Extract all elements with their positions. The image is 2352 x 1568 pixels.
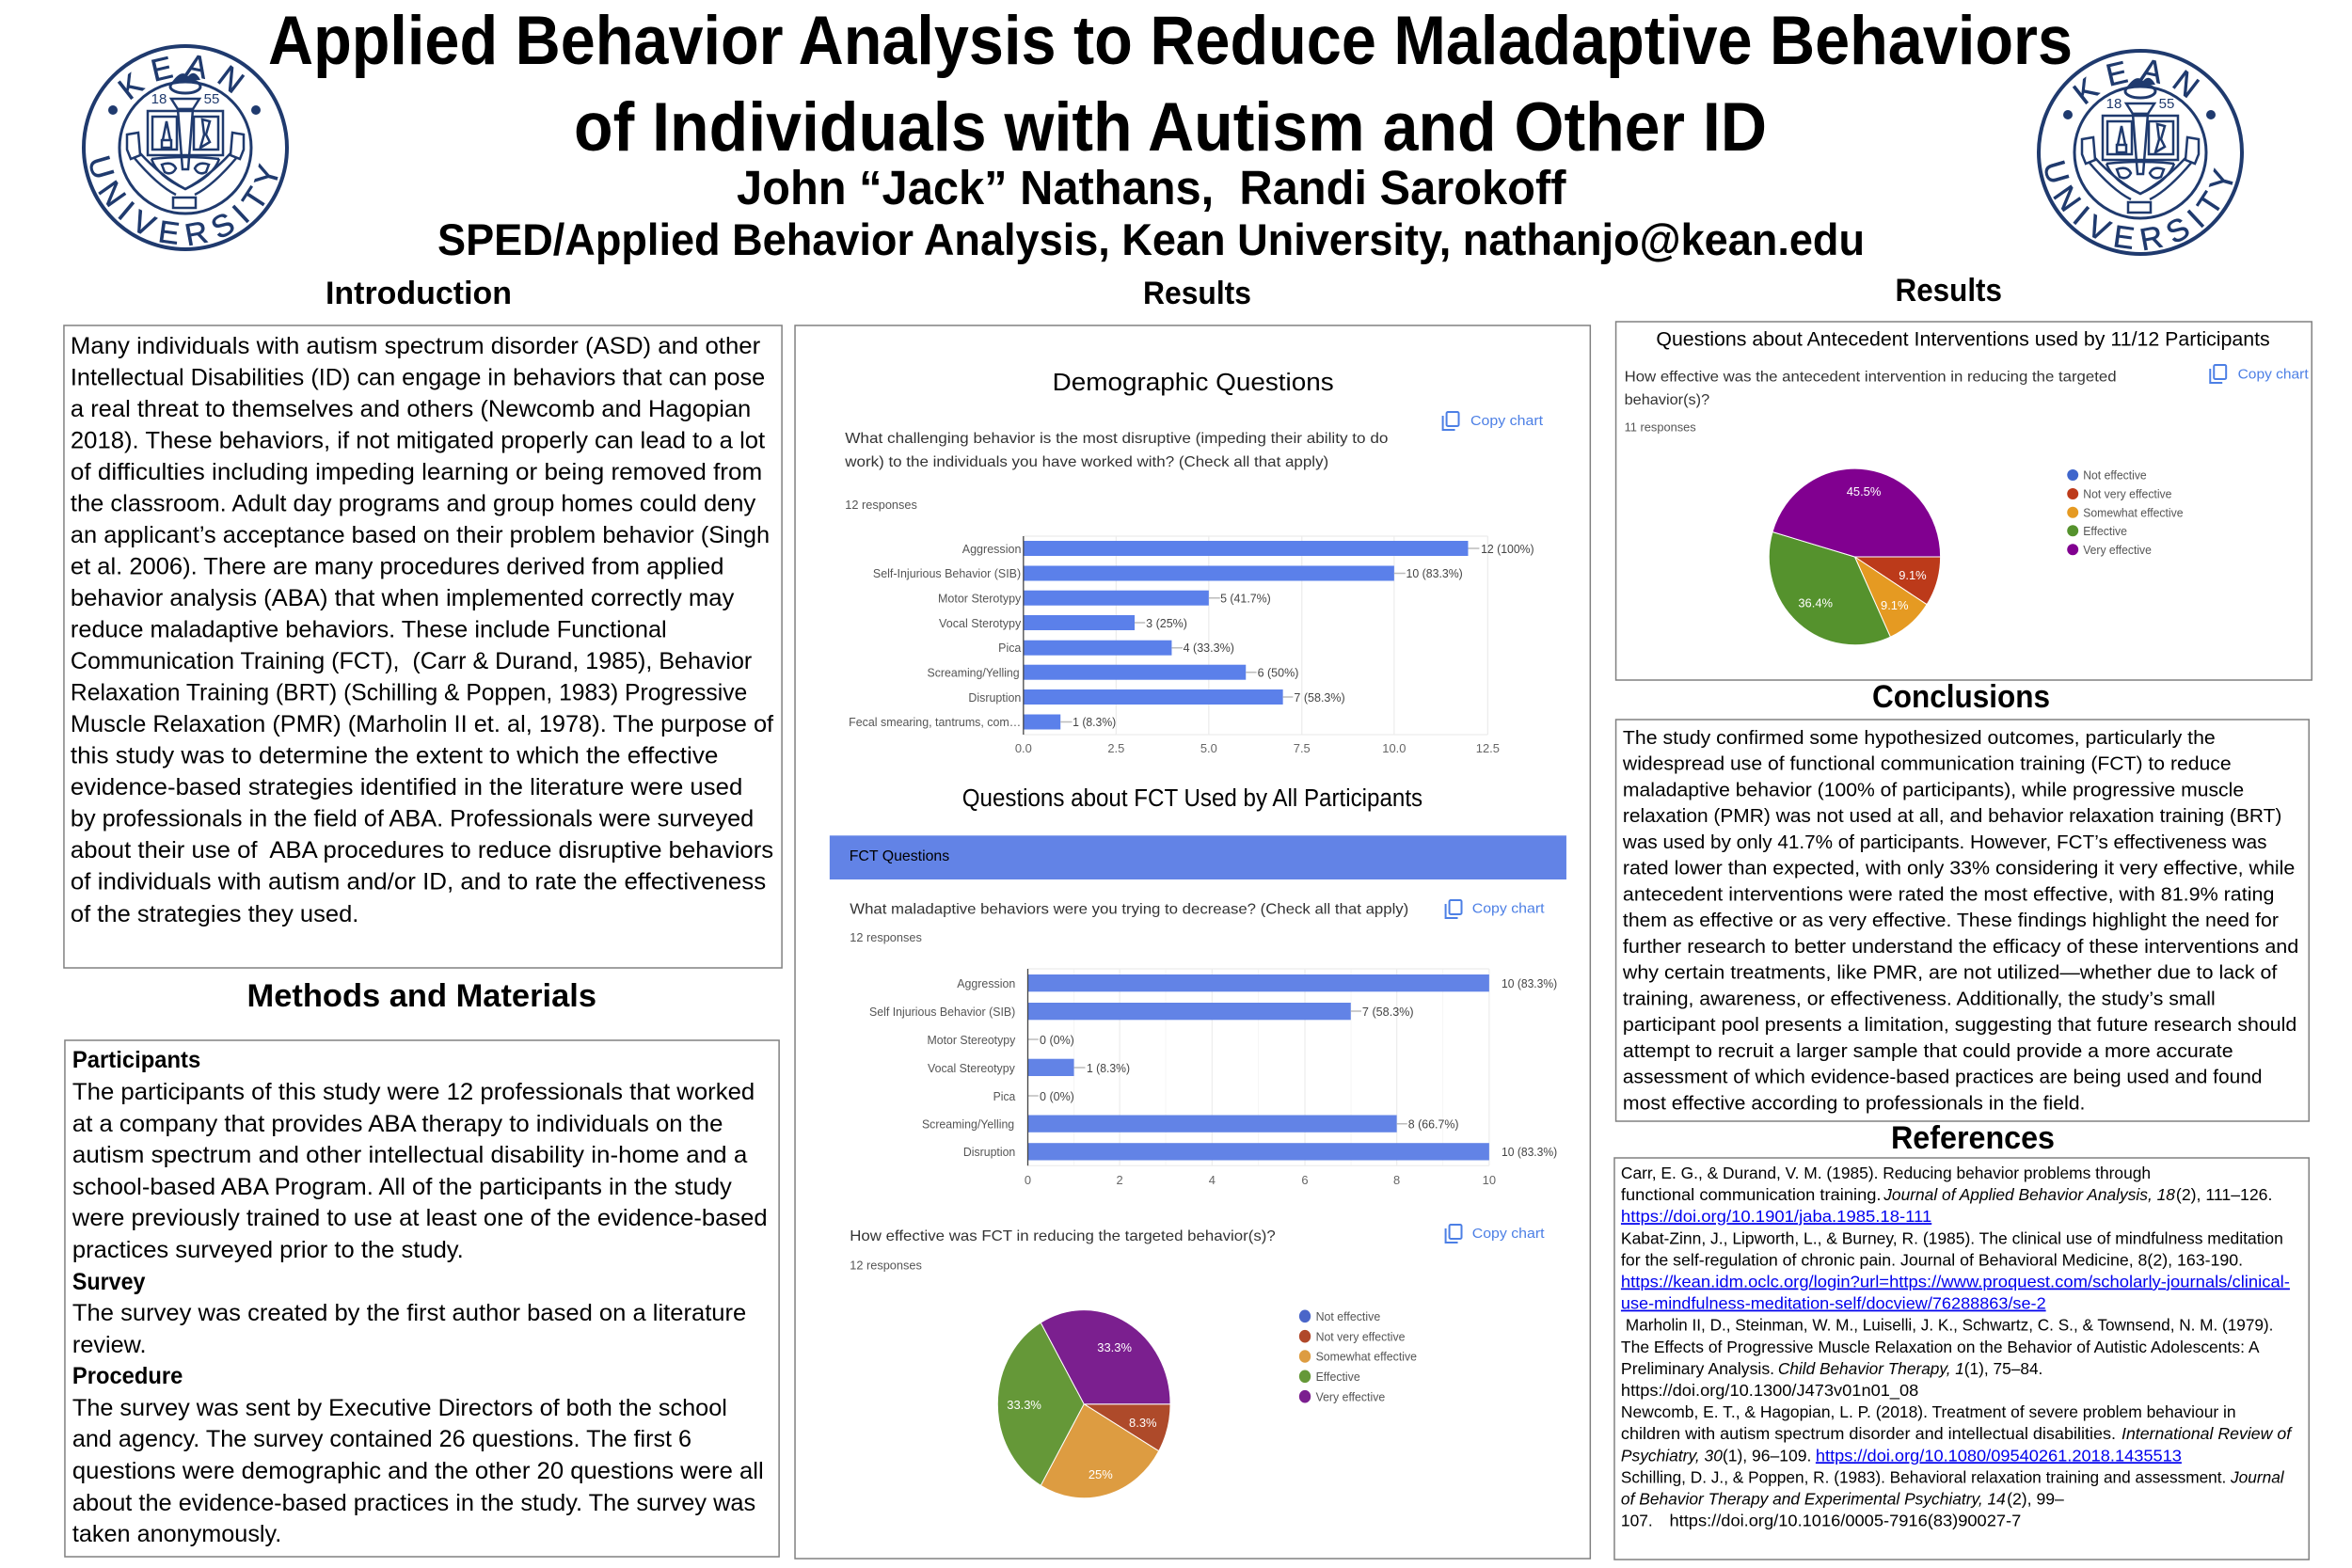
bar chart: challenging behaviors: Vocal Sterotypy: [939, 616, 1022, 630]
bar chart: challenging behaviors: 7 (58.3%): [1294, 690, 1345, 705]
text block: reference list: Preliminary Analysis.: [1621, 1359, 1774, 1378]
icon: Kean University seal, left: 18: [151, 91, 167, 107]
text block: survey: The survey was created by the first author based on a literature: [72, 1300, 746, 1326]
panel: conclusions: [1616, 720, 2309, 1121]
text block: reference list: Psychiatry, 30: [1621, 1446, 1723, 1465]
icon: Kean University seal, right: KEAN: [2072, 60, 2200, 105]
legend: FCT effectiveness: [1299, 1309, 1417, 1403]
text block: conclusions body: widespread use of functional communication training (FCT) to reduce: [1622, 753, 2232, 775]
bar chart: challenging behaviors: Self-Injurious Behavior (SIB): [873, 566, 1021, 580]
bar chart: maladaptive behaviors: Disruption: [963, 1145, 1015, 1159]
bar chart: maladaptive behaviors: 4: [1209, 1173, 1216, 1187]
text block: participants: at a company that provides ABA therapy to individuals on the: [72, 1111, 723, 1137]
text block: conclusions body: rated lower than expected, with only 33% considering it very effective, while: [1623, 858, 2295, 879]
icon: Kean University seal, right: UNIVERSITY: [2045, 160, 2233, 250]
pie chart: FCT effectiveness: 25%: [1089, 1467, 1113, 1481]
icon: copy chart: [1443, 412, 1543, 430]
text block: introduction body: Muscle Relaxation (PMR) (Marholin II et. al, 1978). The purpose of: [71, 711, 773, 737]
text block: reference list: children with autism spectrum disorder and intellectual disabilities.: [1621, 1424, 2116, 1443]
text block: introduction body: the classroom. Adult day programs and group homes could deny: [71, 490, 756, 517]
panel: results centre: [795, 325, 1590, 1559]
text block: reference list: Schilling, D. J., & Poppen, R. (1983). Behavioral relaxation training and assessment.: [1621, 1467, 2226, 1486]
text block: reference list: https://doi.org/10.1080/09540261.2018.1435513: [1816, 1446, 2182, 1465]
banner: FCT Questions: FCT Questions: [850, 848, 949, 864]
text block: reference list: Journal of Applied Behavior Analysis, 18: [1883, 1185, 2175, 1204]
icon: Kean University seal, right: 18: [2106, 96, 2122, 112]
text block: conclusions body: antecedent interventions were rated the most effective, with 81.9% rating: [1623, 883, 2274, 905]
text block: participants: autism spectrum and other intellectual disability in-home and a: [72, 1142, 747, 1168]
text: demographic question: work) to the individuals you have worked with? (Check all that apply): [844, 454, 1328, 470]
text block: introduction body: Communication Training (FCT), (Carr & Durand, 1985), Behavior: [71, 648, 752, 674]
text block: introduction body: this study was to determine the extent to which the effective: [71, 742, 718, 769]
panel: references: [1614, 1158, 2309, 1560]
bar chart: maladaptive behaviors: Vocal Stereotypy: [928, 1061, 1015, 1075]
pie chart: antecedent effectiveness: 36.4%: [1798, 595, 1833, 610]
panel: introduction: [64, 325, 782, 968]
text block: reference list: International Review of: [2122, 1424, 2293, 1443]
legend: antecedent effectiveness: Not very effective: [2083, 487, 2171, 501]
text block: conclusions body: why certain treatments, like PMR, are not utilized—whether due to lack of: [1622, 962, 2278, 984]
bar chart: maladaptive behaviors: 2: [1117, 1173, 1123, 1187]
bar chart: challenging behaviors: Aggression: [962, 542, 1021, 556]
text block: participants: practices surveyed prior to the study.: [72, 1237, 464, 1263]
text: antecedent question: [1625, 370, 2117, 408]
icon: copy chart: Copy chart: [1472, 902, 1545, 917]
text block: procedure: questions were demographic and the other 20 questions were all: [72, 1458, 764, 1484]
bar chart: maladaptive behaviors: 10 (83.3%): [1502, 976, 1557, 990]
text block: reference list: [1621, 1164, 2293, 1530]
text block: conclusions body: further research to better understand the efficacy of these interventions and: [1623, 936, 2298, 958]
text block: reference list: (2), 111–126.: [2176, 1185, 2272, 1204]
bar chart: maladaptive behaviors: Motor Stereotypy: [928, 1033, 1016, 1047]
text: demographic question: What challenging behavior is the most disruptive (impeding their ability to do: [845, 431, 1389, 447]
legend: antecedent effectiveness: Effective: [2083, 524, 2127, 538]
legend: FCT effectiveness: Not effective: [1316, 1309, 1380, 1323]
text block: introduction body: et al. 2006). There are many procedures derived from applied: [71, 553, 723, 580]
icon: copy chart: Copy chart: [1472, 1227, 1545, 1242]
text block: conclusions body: [1622, 727, 2298, 1114]
bar chart: maladaptive behaviors: 0 (0%): [1040, 1089, 1074, 1103]
text: responses count: 12 responses: [850, 930, 922, 944]
icon: copy chart: [1446, 900, 1545, 918]
text block: conclusions body: participant pool presents a limitation, suggesting that future research should: [1623, 1014, 2296, 1036]
bar chart: challenging behaviors: Disruption: [968, 690, 1021, 705]
text block: conclusions body: maladaptive behavior (100% of participants), while progressive muscle: [1623, 779, 2244, 801]
legend: antecedent effectiveness: Very effective: [2083, 543, 2152, 557]
icon: Kean University seal, left: UNIVERSITY: [90, 156, 278, 246]
text block: conclusions body: assessment of which evidence-based practices are being used and found: [1623, 1067, 2262, 1088]
text block: reference list: Child Behavior Therapy, 1: [1778, 1359, 1964, 1378]
text: responses count: 12 responses: [845, 498, 917, 512]
pie chart: FCT effectiveness: [997, 1310, 1170, 1498]
bar chart: challenging behaviors: Screaming/Yelling: [928, 665, 1020, 680]
text block: conclusions body: attempt to recruit a larger sample that could provide a more accurate: [1623, 1040, 2233, 1062]
text block: introduction body: reduce maladaptive behaviors. These include Functional: [71, 616, 667, 643]
legend: FCT effectiveness: Very effective: [1316, 1389, 1385, 1403]
banner: FCT Questions: [830, 835, 1566, 879]
icon: copy chart: [1446, 1225, 1545, 1243]
icon: Kean University seal, right: 55: [2159, 96, 2174, 112]
panel: methods and materials: [65, 1040, 779, 1557]
legend: antecedent effectiveness: Somewhat effective: [2083, 505, 2184, 519]
bar chart: maladaptive behaviors: 1 (8.3%): [1087, 1061, 1130, 1075]
text block: survey: review.: [72, 1332, 147, 1358]
text block: conclusions body: relaxation (PMR) was not used at all, and behavior relaxation training (BRT): [1623, 805, 2281, 827]
bar chart: maladaptive behaviors: Screaming/Yelling: [922, 1117, 1014, 1132]
bar chart: challenging behaviors: 2.5: [1107, 741, 1124, 755]
bar chart: challenging behaviors: 5.0: [1200, 741, 1217, 755]
title: of Individuals with Autism and Other ID: [574, 89, 1767, 166]
text block: survey: Survey: [72, 1269, 146, 1295]
title: Applied Behavior Analysis to Reduce Maladaptive Behaviors: [268, 3, 2073, 79]
icon: copy chart: Copy chart: [1470, 414, 1543, 429]
text: responses count: 12 responses: [850, 1258, 922, 1272]
text block: reference list: Journal: [2230, 1467, 2285, 1486]
pie chart: antecedent effectiveness: 9.1%: [1881, 598, 1909, 612]
bar chart: maladaptive behaviors: 0: [1025, 1173, 1031, 1187]
authors: John “Jack” Nathans, Randi Sarokoff: [737, 161, 1566, 214]
icon: Kean University seal, left: 55: [204, 91, 219, 107]
text block: introduction body: about their use of ABA procedures to reduce disruptive behaviors: [71, 837, 773, 863]
bar chart: challenging behaviors: Pica: [998, 641, 1022, 655]
legend: antecedent effectiveness: [2067, 468, 2184, 557]
text block: reference list: (2), 99–: [2007, 1489, 2064, 1509]
bar chart: maladaptive behaviors: 10: [1483, 1173, 1496, 1187]
bar chart: challenging behaviors: [849, 536, 1534, 755]
bar chart: challenging behaviors: 10 (83.3%): [1406, 566, 1463, 580]
bar chart: challenging behaviors: 0.0: [1015, 741, 1032, 755]
text block: introduction body: of individuals with autism and/or ID, and to rate the effectiveness: [71, 868, 766, 895]
text block: procedure: about the evidence-based practices in the study. The survey was: [72, 1490, 755, 1516]
heading: Results (centre): Results: [1143, 276, 1251, 311]
text block: introduction body: Relaxation Training (BRT) (Schilling & Poppen, 1983) Progressive: [71, 679, 747, 706]
bar chart: challenging behaviors: 12 (100%): [1481, 542, 1534, 556]
text block: procedure: Procedure: [72, 1363, 183, 1389]
pie chart: FCT effectiveness: 8.3%: [1129, 1416, 1157, 1430]
text block: reference list: 107.: [1621, 1512, 1653, 1530]
text block: introduction body: of the strategies they used.: [71, 901, 358, 927]
text: FCT question 1: What maladaptive behaviors were you trying to decrease? (Check all that apply): [850, 901, 1408, 918]
bar chart: maladaptive behaviors: 10 (83.3%): [1502, 1145, 1557, 1159]
heading: Introduction: Introduction: [326, 276, 512, 311]
text block: reference list: Marholin II, D., Steinman, W. M., Luiselli, J. K., Schwartz, C. S., & Townsend, N. M. (1979).: [1626, 1316, 2273, 1335]
text block: procedure: The survey was sent by Executive Directors of both the school: [72, 1395, 727, 1421]
bar chart: challenging behaviors: Fecal smearing, tantrums, com…: [849, 715, 1021, 729]
bar chart: challenging behaviors: 1 (8.3%): [1073, 715, 1116, 729]
text block: conclusions body: most effective according to professionals in the field.: [1623, 1092, 2085, 1114]
text block: participants: school-based ABA Program. All of the participants in the study: [72, 1174, 732, 1200]
text block: introduction body: [71, 333, 773, 927]
text block: introduction body: 2018). These behaviors, if not mitigated properly can lead to a lot: [71, 427, 765, 454]
bar chart: maladaptive behaviors: Aggression: [957, 976, 1015, 990]
text block: reference list: (1), 96–109.: [1723, 1446, 1811, 1465]
text block: conclusions body: training, awareness, or effectiveness. Additionally, the study’s small: [1623, 988, 2216, 1009]
pie chart: FCT effectiveness: 33.3%: [1007, 1398, 1041, 1412]
text block: reference list: (1), 75–84.: [1964, 1359, 2042, 1378]
heading: antecedent interventions: Questions about Antecedent Interventions used by 11/12 Participants: [1656, 327, 2270, 350]
bar chart: maladaptive behaviors: Self Injurious Behavior (SIB): [869, 1005, 1015, 1019]
pie chart: antecedent effectiveness: [1769, 468, 1941, 645]
bar chart: challenging behaviors: 3 (25%): [1146, 616, 1187, 630]
heading: Conclusions: Conclusions: [1872, 679, 2050, 715]
text block: procedure: and agency. The survey contained 26 questions. The first 6: [72, 1426, 691, 1452]
bar chart: challenging behaviors: Motor Sterotypy: [938, 591, 1022, 606]
text block: reference list: The Effects of Progressive Muscle Relaxation on the Behavior of Autistic Adolescents: A: [1621, 1338, 2260, 1356]
text block: conclusions body: was used by only 41.7% of participants. However, FCT’s effectiveness was: [1622, 832, 2266, 853]
text: antecedent question: How effective was the antecedent intervention in reducing the targeted: [1625, 370, 2117, 386]
icon: Kean University seal, left: KEAN: [117, 55, 245, 100]
heading: Methods and Materials: Methods and Materials: [246, 978, 596, 1014]
text block: introduction body: Many individuals with autism spectrum disorder (ASD) and other: [71, 333, 760, 359]
text: antecedent question: behavior(s)?: [1625, 392, 1709, 408]
legend: FCT effectiveness: Effective: [1316, 1370, 1360, 1384]
text block: reference list: https://kean.idm.oclc.org/login?url=https://www.proquest.com/scholarly-journals/clinical-: [1621, 1272, 2290, 1291]
text block: survey: [72, 1269, 746, 1358]
legend: FCT effectiveness: Not very effective: [1316, 1329, 1406, 1343]
text block: reference list: functional communication training.: [1621, 1185, 1882, 1204]
text block: participants: were previously trained to use at least one of the evidence-based: [72, 1205, 768, 1231]
text: demographic question: [844, 431, 1389, 470]
text block: introduction body: of difficulties including impeding learning or being removed from: [71, 459, 762, 485]
icon: Kean University seal, right: [2037, 49, 2244, 256]
text block: participants: Participants: [72, 1047, 200, 1073]
text block: reference list: use-mindfulness-meditation-self/docview/76288863/se-2: [1621, 1294, 2046, 1313]
bar chart: challenging behaviors: 5 (41.7%): [1220, 591, 1271, 606]
heading: Results (right): Results: [1895, 273, 2002, 309]
text: responses count: 11 responses: [1625, 420, 1696, 434]
bar chart: maladaptive behaviors: Pica: [993, 1089, 1016, 1103]
affiliation: SPED/Applied Behavior Analysis, Kean University, nathanjo@kean.edu: [437, 214, 1865, 264]
text block: reference list: for the self-regulation of chronic pain. Journal of Behavioral Medicine, 8(2), 163-190.: [1621, 1250, 2243, 1269]
pie chart: antecedent effectiveness: 45.5%: [1847, 484, 1882, 499]
bar chart: challenging behaviors: 6 (50%): [1258, 665, 1298, 680]
text block: procedure: [72, 1363, 764, 1547]
text block: reference list: https://doi.org/10.1300/J473v01n01_08: [1621, 1381, 1918, 1400]
icon: copy chart: [2210, 365, 2309, 383]
icon: copy chart: Copy chart: [2238, 367, 2309, 382]
bar chart: maladaptive behaviors: 8: [1393, 1173, 1400, 1187]
icon: Kean University seal, left: [82, 44, 289, 251]
text block: introduction body: by professionals in the field of ABA. Professionals were surveyed: [71, 805, 754, 832]
text block: conclusions body: The study confirmed some hypothesized outcomes, particularly the: [1623, 727, 2216, 749]
bar chart: maladaptive behaviors: 6: [1301, 1173, 1309, 1187]
title: [268, 3, 2073, 166]
text block: reference list: Kabat-Zinn, J., Lipworth, L., & Burney, R. (1985). The clinical use of mindfulness meditation: [1621, 1228, 2283, 1247]
text block: conclusions body: them as effective or as very effective. These findings highlight the need for: [1623, 910, 2279, 931]
text block: introduction body: Intellectual Disabilities (ID) can engage in behaviors that can pose: [71, 364, 765, 391]
text block: reference list: of Behavior Therapy and Experimental Psychiatry, 14: [1621, 1489, 2006, 1509]
bar chart: maladaptive behaviors: 0 (0%): [1040, 1033, 1074, 1047]
bar chart: challenging behaviors: 10.0: [1382, 741, 1406, 755]
pie chart: antecedent effectiveness: 9.1%: [1899, 568, 1927, 582]
pie chart: FCT effectiveness: 33.3%: [1097, 1340, 1132, 1354]
heading: FCT questions: Questions about FCT Used by All Participants: [962, 785, 1422, 812]
text block: introduction body: behavior analysis (ABA) that when implemented correctly may: [71, 585, 735, 611]
heading: References: References: [1891, 1120, 2055, 1156]
text block: procedure: taken anonymously.: [72, 1521, 281, 1547]
bar chart: maladaptive behaviors: 8 (66.7%): [1408, 1117, 1459, 1132]
panel: results right: [1616, 322, 2312, 680]
text: FCT question 2: How effective was FCT in reducing the targeted behavior(s)?: [850, 1228, 1276, 1244]
text block: introduction body: a real threat to themselves and others (Newcomb and Hagopian: [71, 396, 751, 422]
text block: reference list: Newcomb, E. T., & Hagopian, L. P. (2018). Treatment of severe problem behaviour in: [1621, 1402, 2236, 1421]
bar chart: challenging behaviors: 12.5: [1476, 741, 1500, 755]
legend: antecedent effectiveness: Not effective: [2083, 468, 2147, 483]
bar chart: maladaptive behaviors: [869, 969, 1557, 1187]
text block: participants: The participants of this study were 12 professionals that worked: [72, 1079, 755, 1105]
bar chart: challenging behaviors: 7.5: [1294, 741, 1311, 755]
bar chart: maladaptive behaviors: 7 (58.3%): [1362, 1005, 1414, 1019]
text block: introduction body: an applicant’s acceptance based on their problem behavior (Singh: [71, 522, 770, 548]
text block: reference list: https://doi.org/10.1901/jaba.1985.18-111: [1621, 1207, 1931, 1226]
legend: FCT effectiveness: Somewhat effective: [1316, 1350, 1417, 1364]
text block: reference list: https://doi.org/10.1016/0005-7916(83)90027-7: [1669, 1512, 2021, 1530]
text block: participants: [72, 1047, 768, 1263]
heading: Demographic Questions: Demographic Questions: [1053, 370, 1334, 396]
bar chart: challenging behaviors: 4 (33.3%): [1184, 641, 1234, 655]
text block: introduction body: evidence-based strategies identified in the literature were used: [71, 774, 742, 800]
text block: reference list: Carr, E. G., & Durand, V. M. (1985). Reducing behavior problems through: [1621, 1164, 2151, 1182]
